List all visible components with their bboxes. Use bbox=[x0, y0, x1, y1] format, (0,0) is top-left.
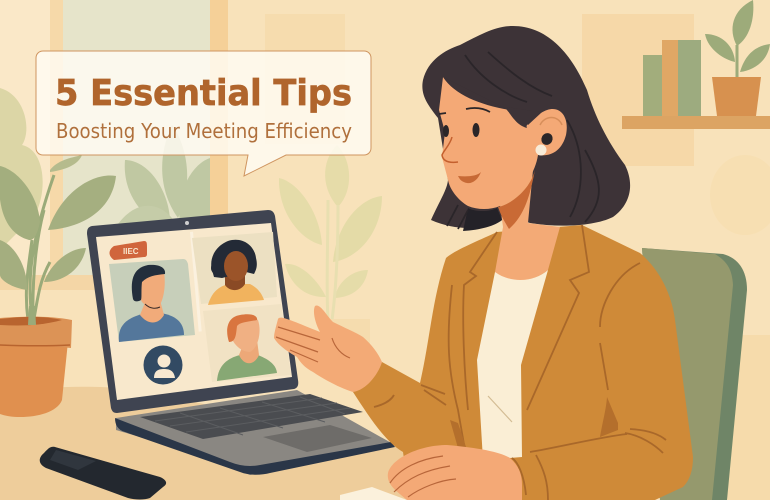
rec badge: IIEC bbox=[123, 247, 139, 256]
laptop screen bbox=[96, 223, 292, 400]
laptop base bbox=[116, 390, 395, 475]
avatar icon bbox=[144, 346, 182, 384]
laptop bbox=[87, 210, 395, 475]
subtitle: Boosting Your Meeting Efficiency bbox=[56, 119, 352, 143]
tile: participant three bbox=[203, 304, 291, 382]
woman bbox=[274, 26, 693, 500]
resting hand bbox=[388, 445, 522, 500]
papers bbox=[340, 487, 407, 500]
blazer bbox=[353, 225, 693, 500]
chair bbox=[642, 248, 747, 500]
blazer creases bbox=[374, 225, 666, 453]
shelf with books and plant bbox=[622, 0, 770, 129]
rec badge bbox=[110, 241, 147, 260]
neck bbox=[495, 170, 560, 280]
face bbox=[439, 77, 567, 209]
potted plant bbox=[0, 155, 116, 417]
keyboard bbox=[140, 394, 363, 439]
title speech bubble bbox=[36, 51, 371, 176]
tile: participant two bbox=[192, 232, 277, 305]
hair fringe bbox=[443, 77, 540, 128]
hair strands bbox=[447, 52, 599, 229]
shirt bbox=[477, 270, 548, 460]
hair back bbox=[422, 26, 630, 228]
trackpad bbox=[263, 425, 372, 452]
title: 5 Essential Tips bbox=[55, 73, 352, 114]
tile: participant one bbox=[109, 259, 195, 342]
laptop lid bbox=[87, 210, 298, 413]
gesturing hand bbox=[274, 306, 382, 392]
facial features bbox=[439, 108, 562, 183]
table bbox=[0, 387, 420, 500]
background plants bbox=[0, 88, 382, 359]
smartphone bbox=[40, 447, 166, 500]
